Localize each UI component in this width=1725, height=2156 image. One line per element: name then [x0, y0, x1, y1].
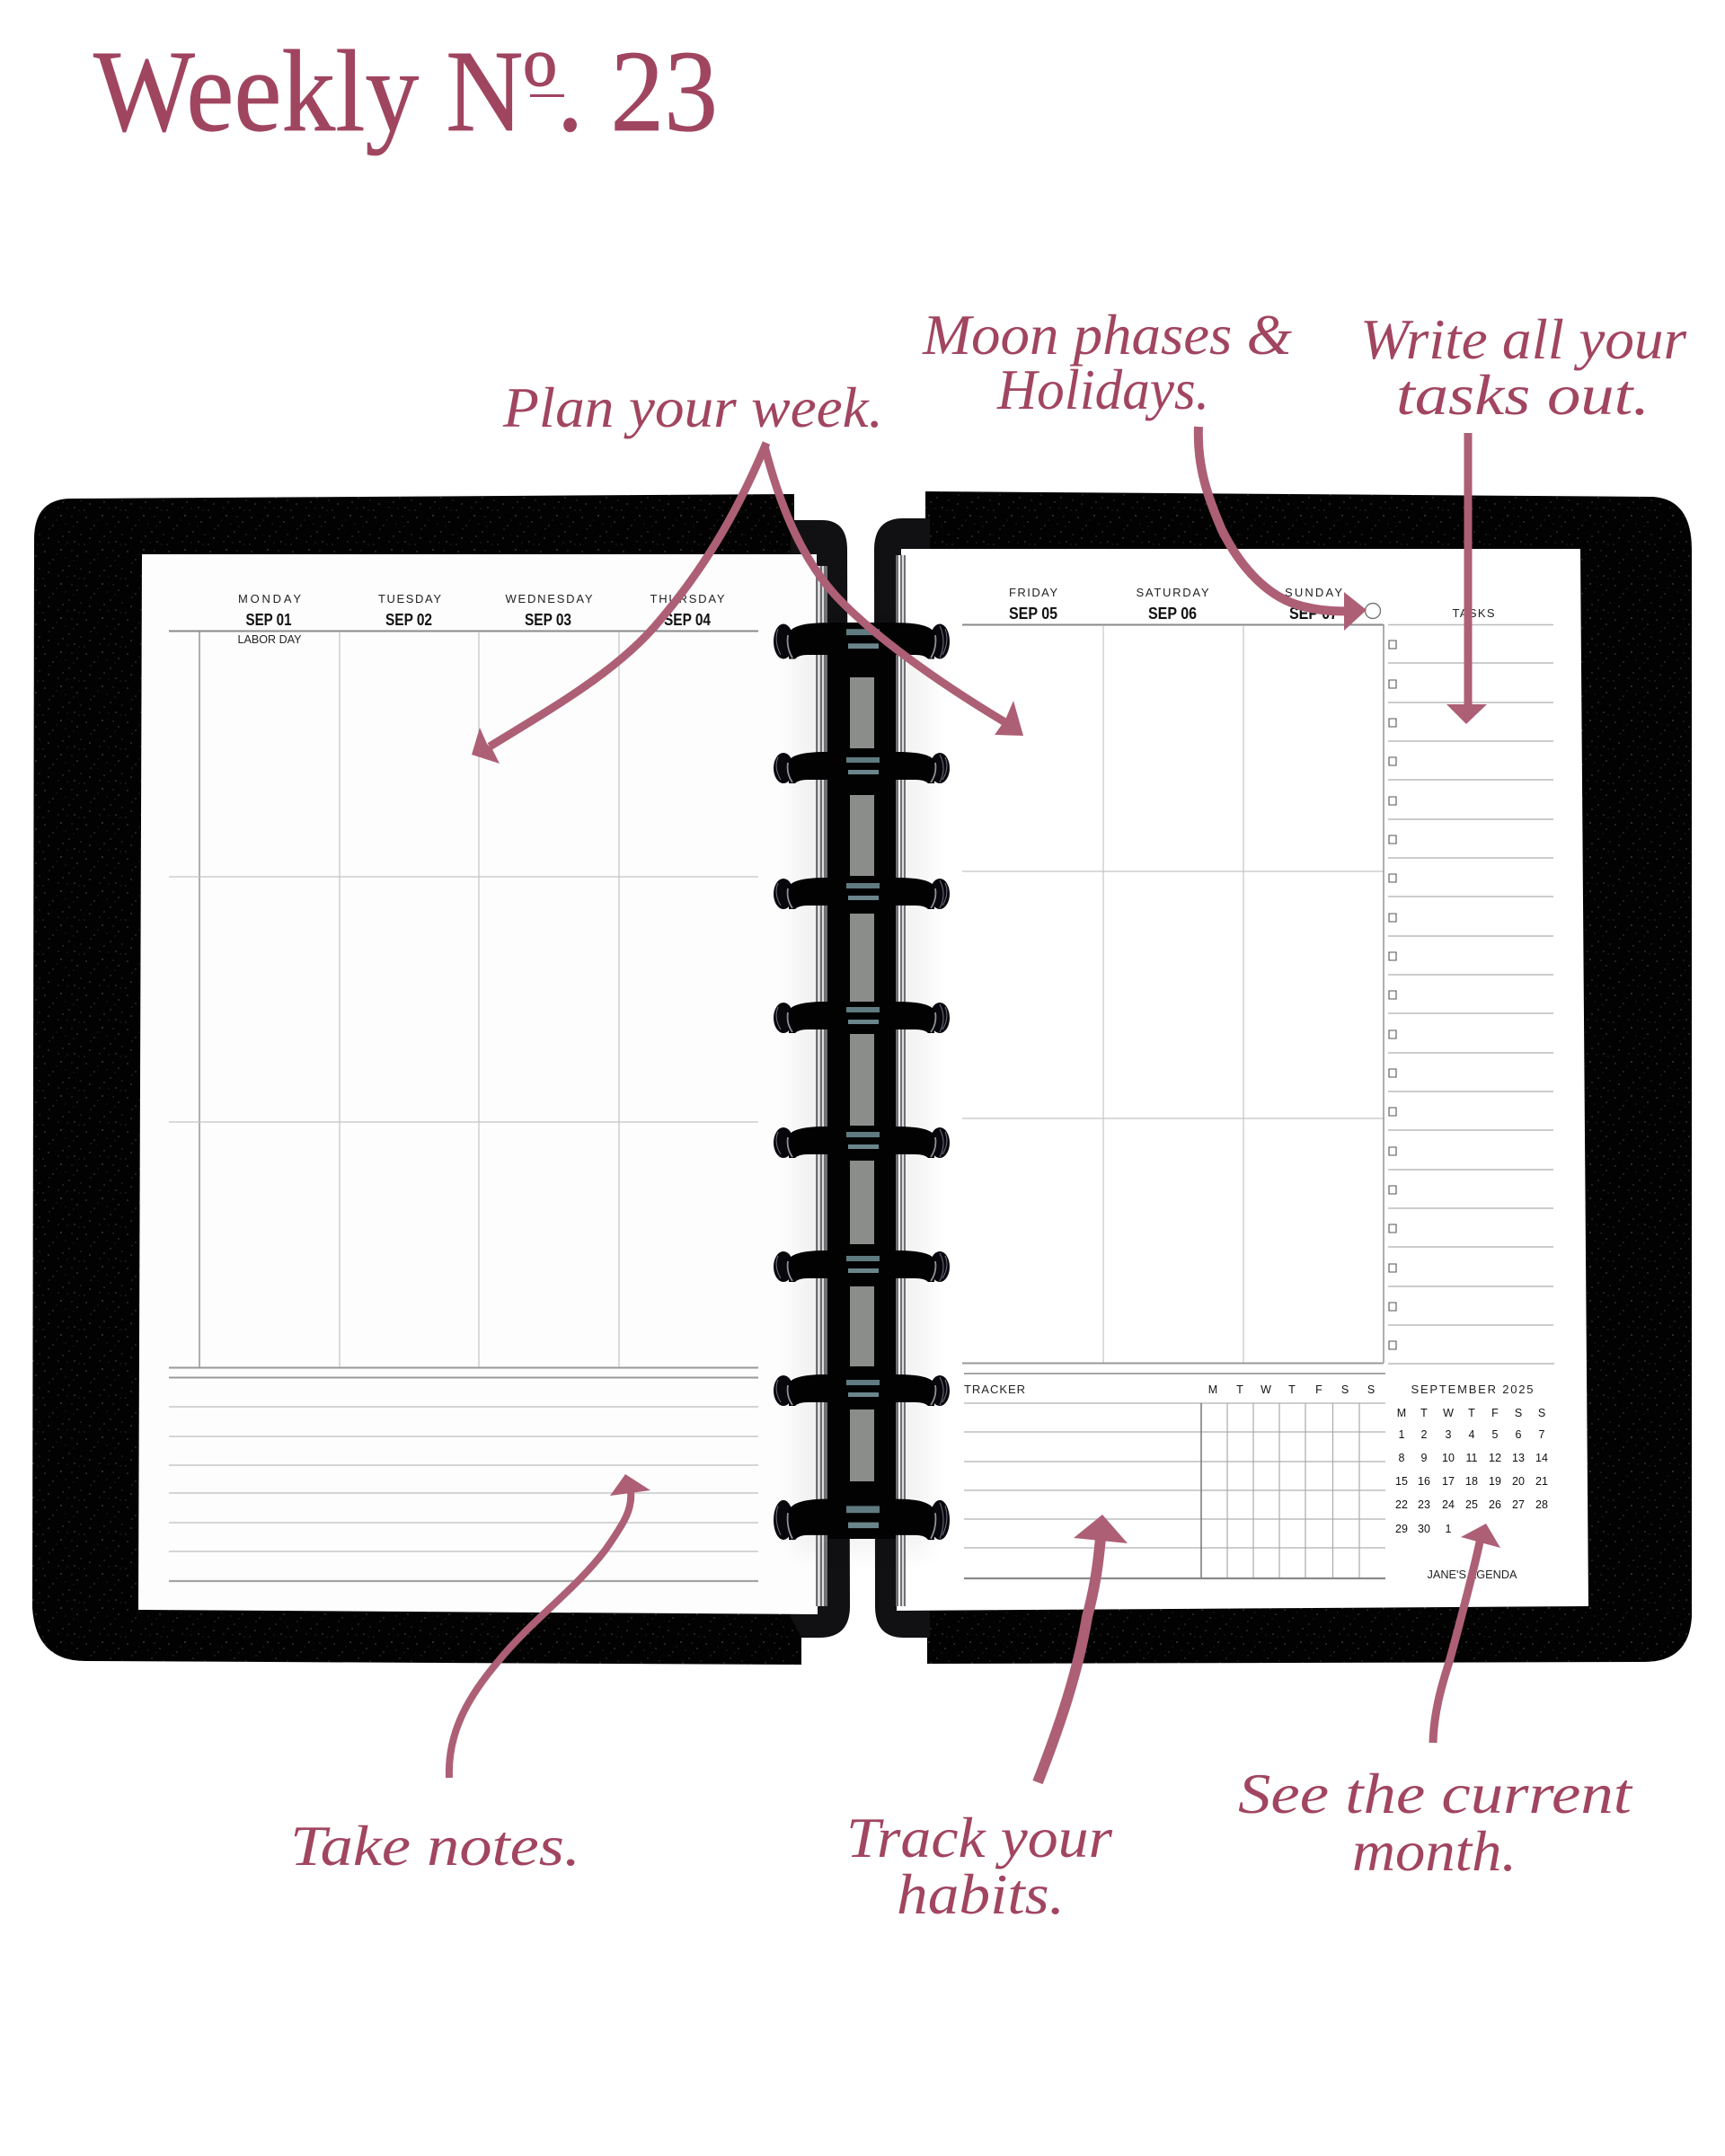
mini calendar: 7 — [1539, 1428, 1545, 1441]
label: track your habits: Track your — [846, 1806, 1113, 1869]
left page header labels: TUESDAY — [378, 592, 441, 605]
left binder backing — [791, 520, 850, 1638]
mini calendar: 26 — [1489, 1498, 1501, 1511]
title: Weekly Nº. 23 — [93, 27, 718, 156]
mini calendar: S — [1515, 1407, 1522, 1419]
page edge stack: left — [816, 566, 827, 1606]
right page header labels: SEP 06 — [1148, 605, 1197, 623]
mini calendar: 9 — [1421, 1452, 1428, 1464]
left page header labels: SEP 04 — [664, 611, 711, 629]
left leather cover — [32, 494, 818, 1665]
right page header labels: TASKS — [1452, 606, 1495, 620]
mini calendar: 8 — [1399, 1452, 1405, 1464]
left page header labels: MONDAY — [238, 592, 301, 605]
label: moon phases and holidays — [922, 303, 1292, 421]
mini calendar: SEPTEMBER 2025 — [1411, 1383, 1533, 1396]
label: see the current month: month. — [1352, 1819, 1517, 1883]
ring shadows — [795, 629, 930, 1554]
mini calendar: 27 — [1512, 1498, 1525, 1511]
arrow: see current month — [1433, 1524, 1500, 1743]
mini calendar: S — [1538, 1407, 1545, 1419]
mini calendar: 12 — [1489, 1452, 1501, 1464]
habit tracker: S — [1341, 1383, 1349, 1396]
arrow: moon phases — [1199, 427, 1367, 631]
right planner page — [897, 549, 1588, 1611]
mini calendar: 5 — [1492, 1428, 1499, 1441]
mini calendar: 4 — [1469, 1428, 1475, 1441]
mini calendar: 30 — [1418, 1523, 1430, 1535]
mini calendar: 6 — [1516, 1428, 1522, 1441]
label: take notes: Take notes. — [290, 1814, 580, 1878]
mini calendar — [1395, 1383, 1548, 1581]
arrow: write all your tasks — [1446, 433, 1487, 724]
arrow: track habits — [1038, 1515, 1128, 1782]
binder spine — [827, 623, 896, 1539]
label: moon phases and holidays: Moon phases & — [922, 303, 1292, 367]
mini calendar: 16 — [1418, 1475, 1430, 1488]
label: see the current month — [1238, 1762, 1634, 1883]
label: write all your tasks out: Write all your — [1360, 307, 1687, 371]
right page header labels: SEP 05 — [1009, 605, 1057, 623]
left page header labels: WEDNESDAY — [505, 592, 593, 605]
mini calendar: 17 — [1442, 1475, 1455, 1488]
label: moon phases and holidays: Holidays. — [996, 358, 1209, 421]
mini calendar: 1 — [1446, 1523, 1452, 1535]
label: plan your week: Plan your week. — [502, 376, 883, 439]
task checkboxes — [1389, 641, 1396, 1349]
left planner page — [138, 554, 818, 1614]
mini calendar: JANE'S AGENDA — [1427, 1568, 1517, 1581]
left page header labels — [237, 592, 725, 646]
mini calendar: T — [1420, 1407, 1428, 1419]
left week grid — [169, 631, 758, 1378]
mini calendar: 14 — [1535, 1452, 1548, 1464]
mini calendar: 11 — [1466, 1452, 1478, 1464]
page sheet: right — [897, 549, 1588, 1611]
left page header labels: SEP 01 — [246, 611, 291, 629]
left page header labels: LABOR DAY — [237, 632, 302, 646]
habit tracker: TRACKER — [964, 1383, 1025, 1396]
label: write all your tasks out: tasks out. — [1396, 363, 1650, 427]
mini calendar: 23 — [1418, 1498, 1430, 1511]
mini calendar: 13 — [1512, 1452, 1525, 1464]
right page header labels — [1009, 586, 1495, 623]
right page header labels: SUNDAY — [1285, 586, 1342, 599]
mini calendar: 15 — [1395, 1475, 1408, 1488]
mini calendar: W — [1443, 1407, 1454, 1419]
mini calendar: F — [1491, 1407, 1499, 1419]
habit tracker: W — [1261, 1383, 1271, 1396]
right page header labels: FRIDAY — [1009, 586, 1057, 599]
right leather cover — [925, 491, 1692, 1664]
task list lines — [1388, 625, 1554, 1364]
habit tracker: T — [1288, 1383, 1296, 1396]
mini calendar: 24 — [1442, 1498, 1455, 1511]
label: track your habits: habits. — [897, 1862, 1065, 1926]
habit tracker — [964, 1374, 1385, 1578]
page edge stack: right — [896, 555, 906, 1606]
mini calendar: T — [1468, 1407, 1475, 1419]
label: write all your tasks out — [1360, 307, 1687, 427]
mini calendar: 10 — [1442, 1452, 1455, 1464]
left page header labels: THURSDAY — [650, 592, 725, 605]
mini calendar: 19 — [1489, 1475, 1501, 1488]
icon: moon phase circle — [1366, 604, 1380, 618]
left page header labels: SEP 03 — [525, 611, 571, 629]
arrow: plan your week, right branch — [765, 446, 1023, 736]
mini calendar: 2 — [1421, 1428, 1428, 1441]
label: see the current month: See the current — [1238, 1762, 1634, 1825]
label: track your habits — [846, 1806, 1113, 1926]
binder rings — [774, 623, 950, 1540]
right binder backing — [874, 518, 930, 1638]
mini calendar: 21 — [1535, 1475, 1548, 1488]
mini calendar: 20 — [1512, 1475, 1525, 1488]
habit tracker: S — [1367, 1383, 1375, 1396]
mini calendar: 28 — [1535, 1498, 1548, 1511]
left notes lines — [169, 1407, 758, 1551]
mini calendar: 25 — [1465, 1498, 1478, 1511]
habit tracker: T — [1236, 1383, 1243, 1396]
right week grid — [962, 624, 1384, 1364]
mini calendar: 29 — [1395, 1523, 1408, 1535]
right page header labels: SEP 07 — [1289, 605, 1338, 623]
right page header labels: SATURDAY — [1136, 586, 1209, 599]
spine windows — [850, 677, 874, 1481]
habit tracker: F — [1315, 1383, 1322, 1396]
mini calendar: 18 — [1465, 1475, 1478, 1488]
arrow: take notes — [449, 1474, 650, 1778]
mini calendar: 1 — [1399, 1428, 1405, 1441]
page sheet: left — [138, 554, 818, 1614]
mini calendar: 22 — [1395, 1498, 1408, 1511]
habit tracker: M — [1208, 1383, 1217, 1396]
mini calendar: M — [1397, 1407, 1406, 1419]
mini calendar: 3 — [1446, 1428, 1452, 1441]
left page header labels: SEP 02 — [385, 611, 432, 629]
arrow: plan your week, left branch — [472, 443, 766, 764]
